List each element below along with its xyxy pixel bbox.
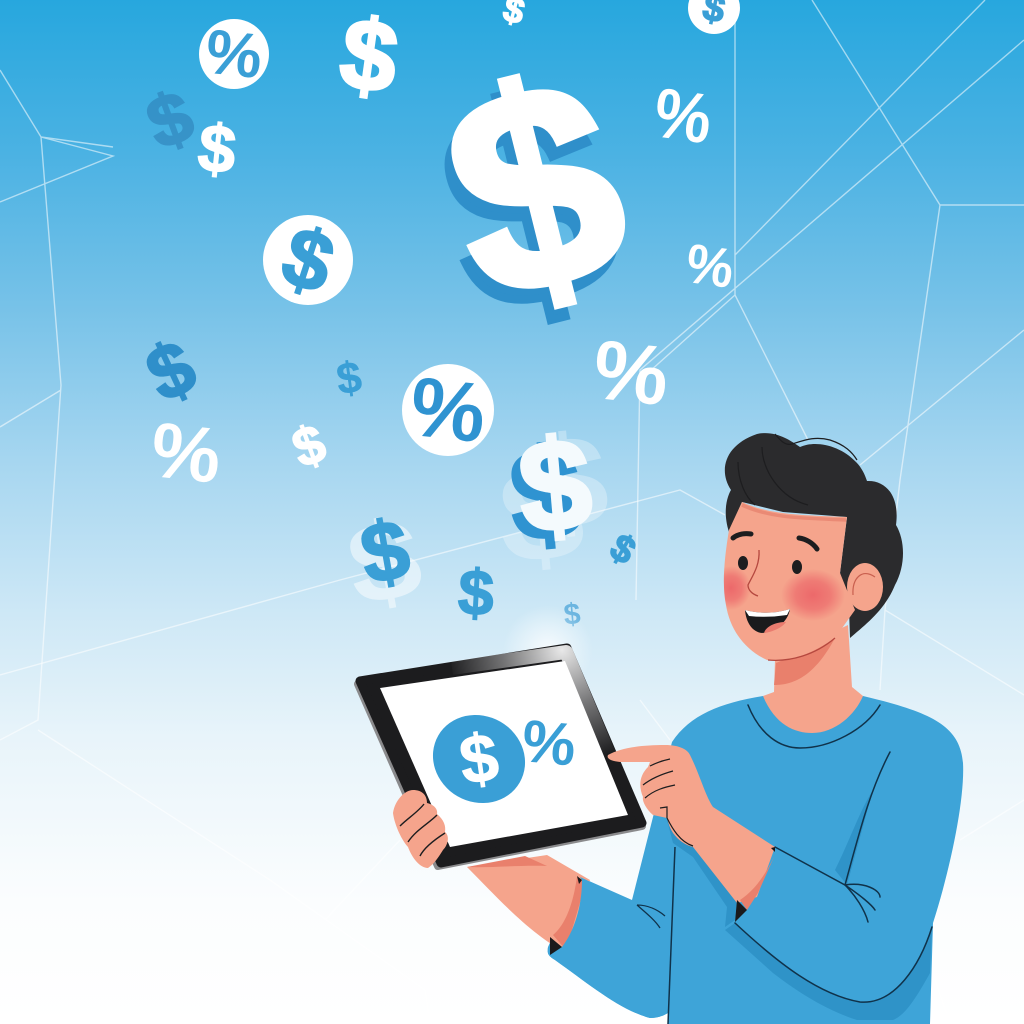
white dollar left: $ xyxy=(195,110,239,189)
screen dollar badge xyxy=(417,698,541,820)
blurred dollar center: $ xyxy=(504,421,587,569)
tablet xyxy=(358,648,642,866)
holding hand xyxy=(393,790,448,868)
sweater fold lines xyxy=(735,705,932,1002)
floating symbols xyxy=(134,0,740,632)
hair edge shadow on forehead xyxy=(742,505,846,520)
left sleeve xyxy=(548,877,672,1018)
blue dollar small: $ xyxy=(334,352,365,404)
person xyxy=(358,433,963,1024)
blurred dollar center: $ xyxy=(493,438,590,592)
blurred dollar center xyxy=(490,406,617,592)
big dollar sign: $ xyxy=(413,32,645,376)
sweater shadows xyxy=(667,790,932,1020)
dollar badge top right xyxy=(688,0,740,34)
white dollar small: $ xyxy=(285,413,334,480)
screen dollar badge: $ xyxy=(455,719,503,799)
faded dollar with ghost copy: $ xyxy=(354,501,416,602)
blue dollar left: $ xyxy=(136,74,203,165)
tablet glare xyxy=(452,652,610,757)
blush right xyxy=(784,572,842,618)
dollar low: $ xyxy=(456,556,496,630)
eyes, brows and nose xyxy=(733,534,835,660)
blue dollar mid left: $ xyxy=(134,324,208,419)
screen percent: % xyxy=(520,707,579,779)
ear xyxy=(847,563,883,611)
blurred dollar center: $ xyxy=(513,412,597,560)
big dollar sign: $ xyxy=(420,17,651,361)
hair xyxy=(725,433,903,638)
neck xyxy=(763,625,863,733)
dollar right of center: $ xyxy=(603,526,642,573)
forearm holding xyxy=(467,855,590,955)
percent badge mid: % xyxy=(406,359,490,460)
dollar badge left: $ xyxy=(271,208,345,311)
blurred dollar center: $ xyxy=(518,406,614,558)
left sleeve details xyxy=(550,847,675,1024)
tablet glow xyxy=(503,605,593,695)
percent badge top: % xyxy=(202,17,265,92)
percent mid right: % xyxy=(589,322,673,423)
dollar top: $ xyxy=(334,0,404,115)
blush left xyxy=(724,568,749,608)
percent right: % xyxy=(682,232,738,300)
faded dollar with ghost copy: $ xyxy=(338,494,431,630)
sweater xyxy=(548,696,963,1024)
percent left: % xyxy=(147,405,225,500)
hair highlight lines xyxy=(738,434,857,505)
smile xyxy=(745,609,790,633)
face xyxy=(724,502,855,660)
dollar tiny: $ xyxy=(562,598,582,632)
pointing arm and hand xyxy=(608,745,775,922)
percent top right: % xyxy=(649,74,717,159)
neck shadow xyxy=(774,638,835,685)
